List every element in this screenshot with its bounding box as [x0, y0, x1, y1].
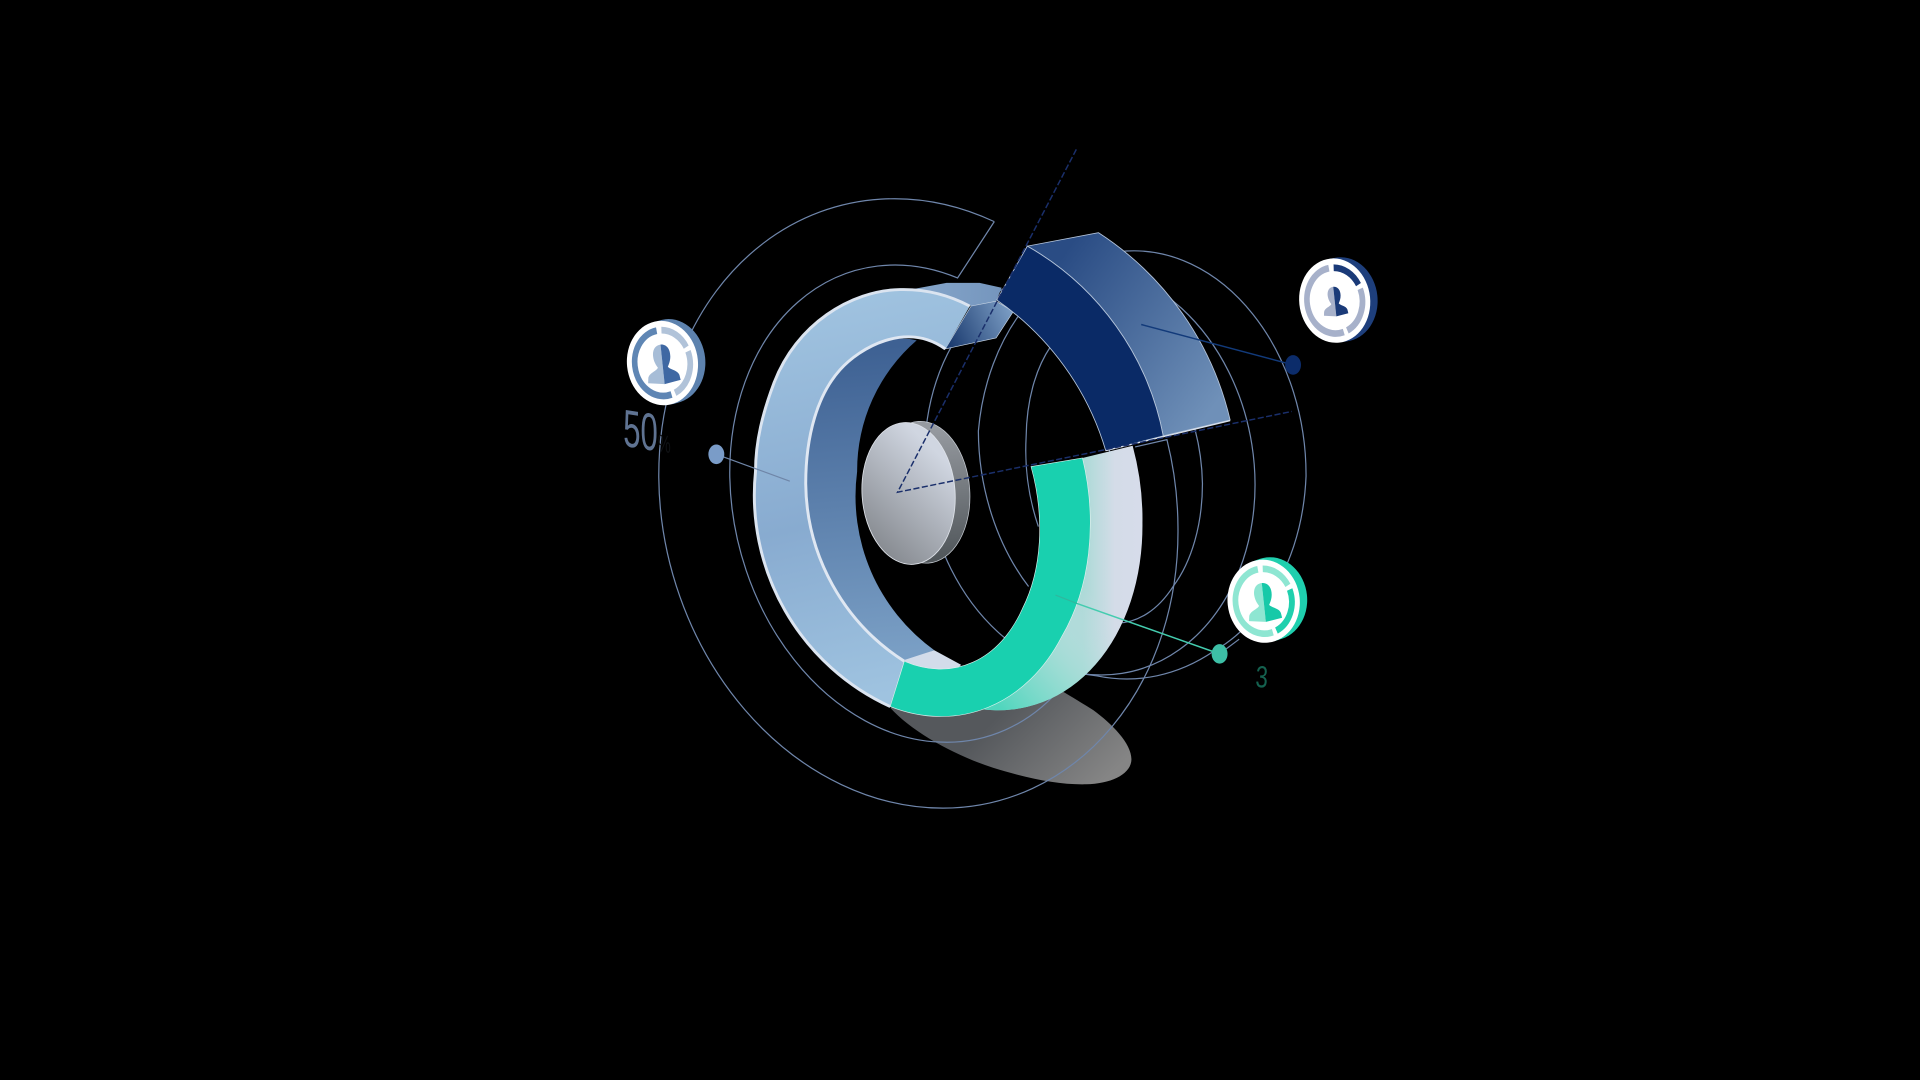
navy segment front face: [997, 246, 1163, 451]
teal segment inner wall: [904, 650, 961, 676]
centre disk: [857, 418, 975, 568]
teal segment outer wall: [955, 446, 1142, 710]
leader: blue: [708, 444, 790, 481]
dashed axes: [898, 149, 1292, 492]
blue segment inner wall: [806, 339, 934, 661]
blue segment cut end: [945, 301, 1013, 349]
icon: teal person coin: [1223, 554, 1311, 646]
label: 50%: 50%: [623, 400, 671, 465]
label: 3: 3: [1255, 659, 1269, 694]
outer orbit arc: [659, 199, 1178, 808]
leader: navy: [1141, 324, 1301, 375]
disk face: [857, 419, 960, 568]
right orbit middle: [896, 241, 1284, 699]
navy segment outer wall: [1027, 233, 1230, 436]
right orbit inner: [1026, 329, 1202, 623]
navy segment bottom edge highlight: [1106, 421, 1230, 451]
second orbit arc: [730, 222, 1113, 742]
shadow: [890, 686, 1131, 784]
leader: teal: [1056, 595, 1239, 664]
disk side: [872, 418, 975, 566]
teal segment front face: [890, 458, 1090, 717]
icon: navy person coin: [1295, 254, 1382, 346]
right orbit outer: [978, 251, 1306, 679]
icon: blue person coin: [623, 315, 710, 409]
blue segment front face: [754, 290, 970, 707]
blue segment top wall: [913, 283, 1002, 306]
orbit rings: [659, 199, 1306, 808]
